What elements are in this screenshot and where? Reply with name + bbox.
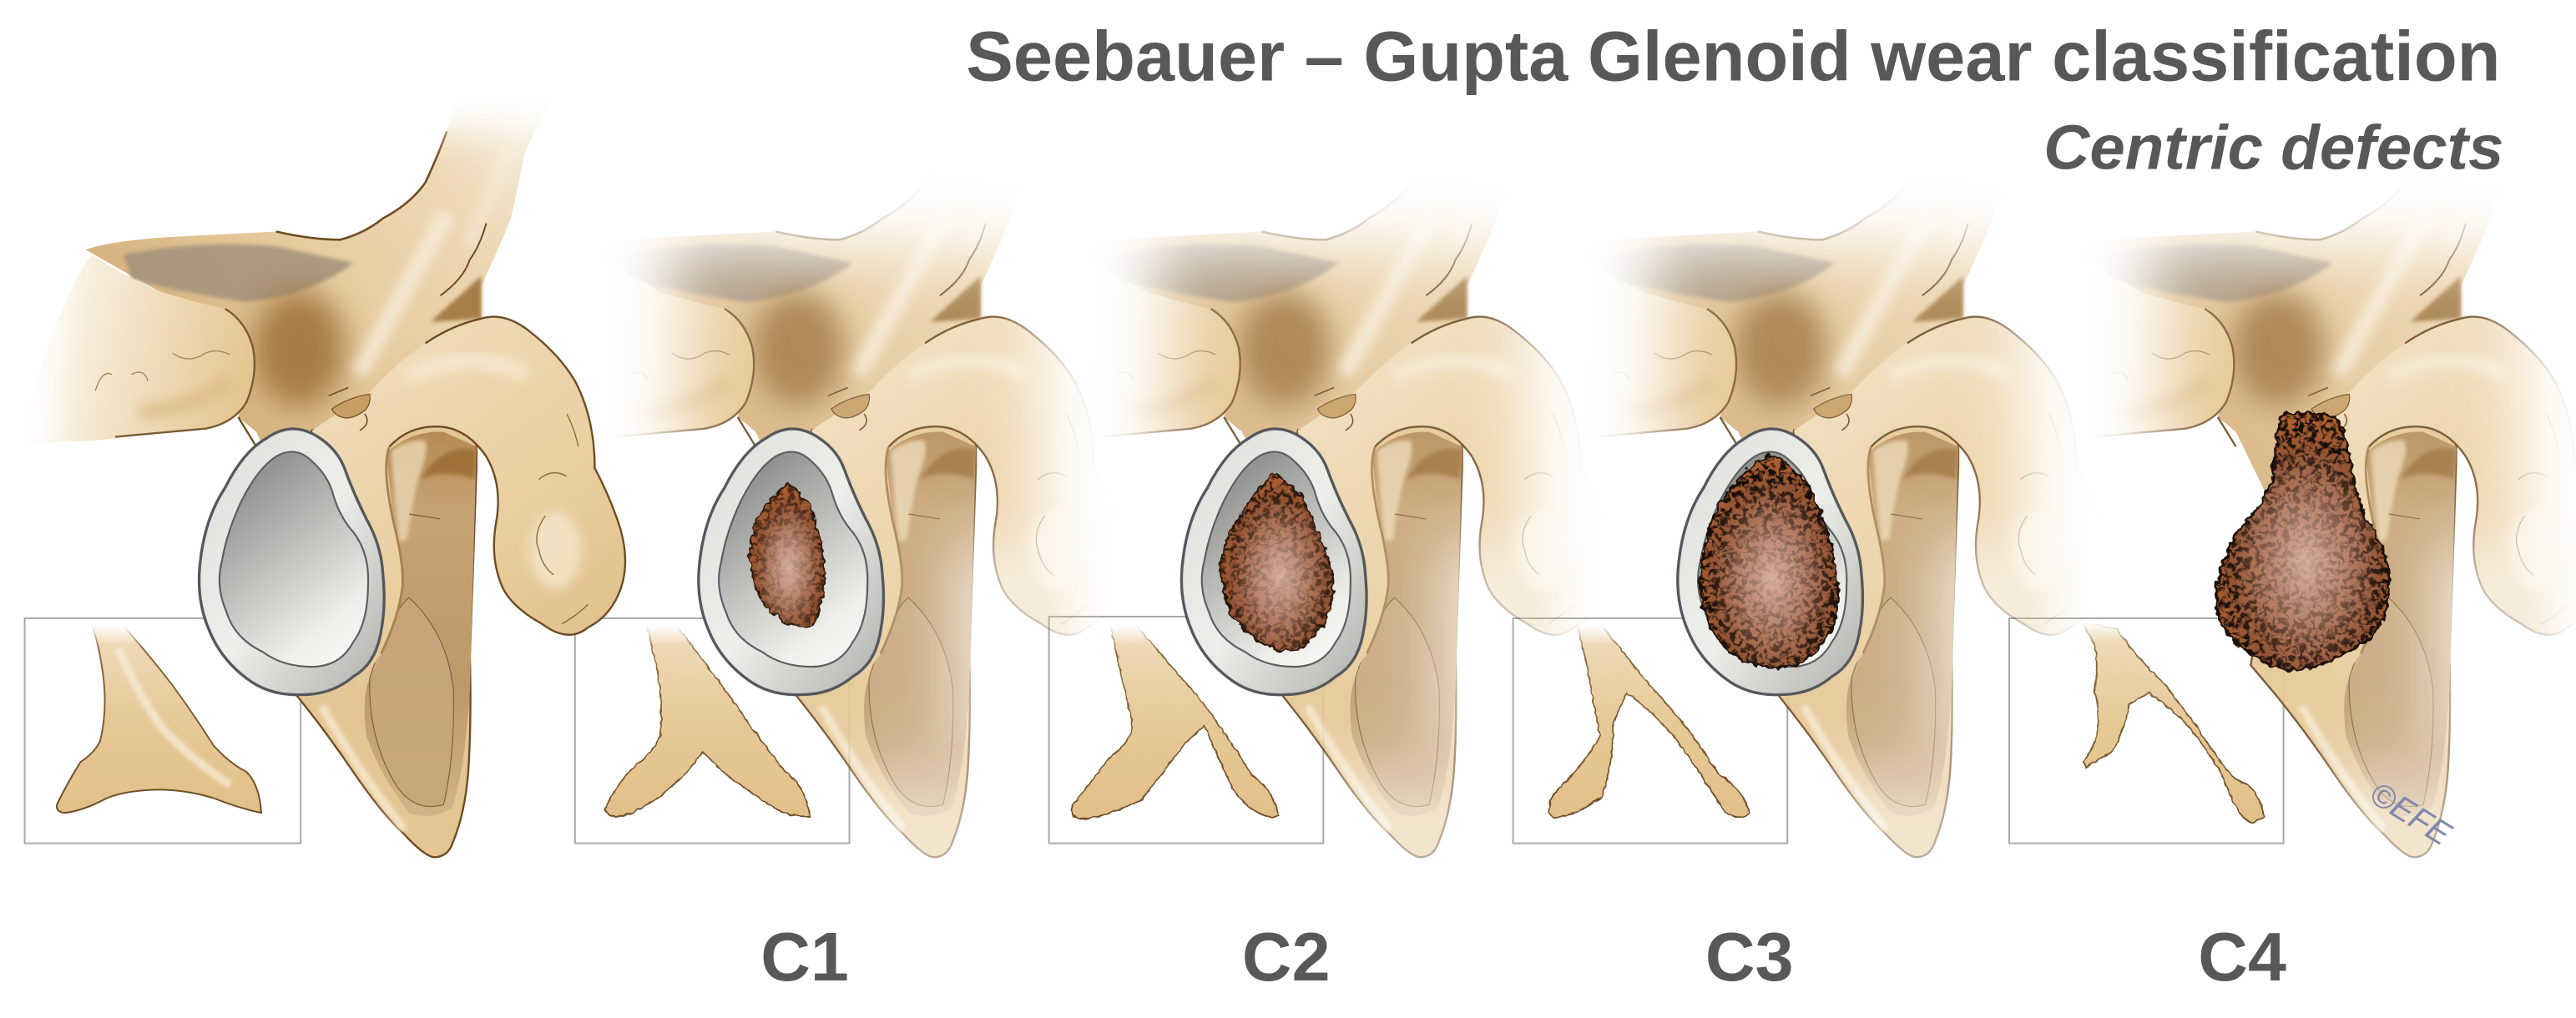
defect C3 (1700, 455, 1838, 668)
defect C1 (750, 485, 825, 628)
subtitle: Centric defects (2043, 113, 2503, 183)
inset box C1 (575, 618, 850, 844)
inset box C4 (2009, 618, 2284, 844)
defect C2 (1221, 473, 1333, 652)
inset cross-section C1 (604, 626, 810, 816)
inset box C3 (1513, 618, 1787, 844)
defect C4 (2216, 413, 2389, 670)
panel: C1 (574, 192, 1099, 858)
scapula reference (25, 95, 625, 857)
label C2: C2 (1242, 918, 1331, 995)
panel: C4 (2008, 192, 2576, 858)
inset box reference (25, 618, 301, 844)
glenoid C3 (1678, 429, 1862, 695)
inset cross-section C4 (2084, 622, 2264, 822)
label C3: C3 (1705, 918, 1794, 995)
inset cross-section C2 (1072, 626, 1278, 819)
inset cross-section reference (57, 626, 261, 813)
inset box C2 (1049, 617, 1323, 844)
panel: C3 (1513, 192, 2080, 858)
inset cross-section C3 (1549, 626, 1750, 818)
scapula C3 (1601, 192, 2080, 858)
label C1: C1 (760, 918, 849, 995)
glenoid C2 (1181, 429, 1366, 695)
scapula C2 (1105, 192, 1584, 858)
title: Seebauer – Gupta Glenoid wear classification (966, 16, 2500, 95)
glenoid reference (200, 429, 384, 695)
scapula C4 (2099, 192, 2576, 858)
label C4: C4 (2198, 918, 2286, 995)
panel: reference normal glenoid (25, 95, 625, 857)
copyright mark: ©EFE (2363, 775, 2458, 853)
panel: C2 (1048, 192, 1584, 858)
scapula C1 (619, 192, 1099, 858)
glenoid C1 (699, 429, 883, 695)
